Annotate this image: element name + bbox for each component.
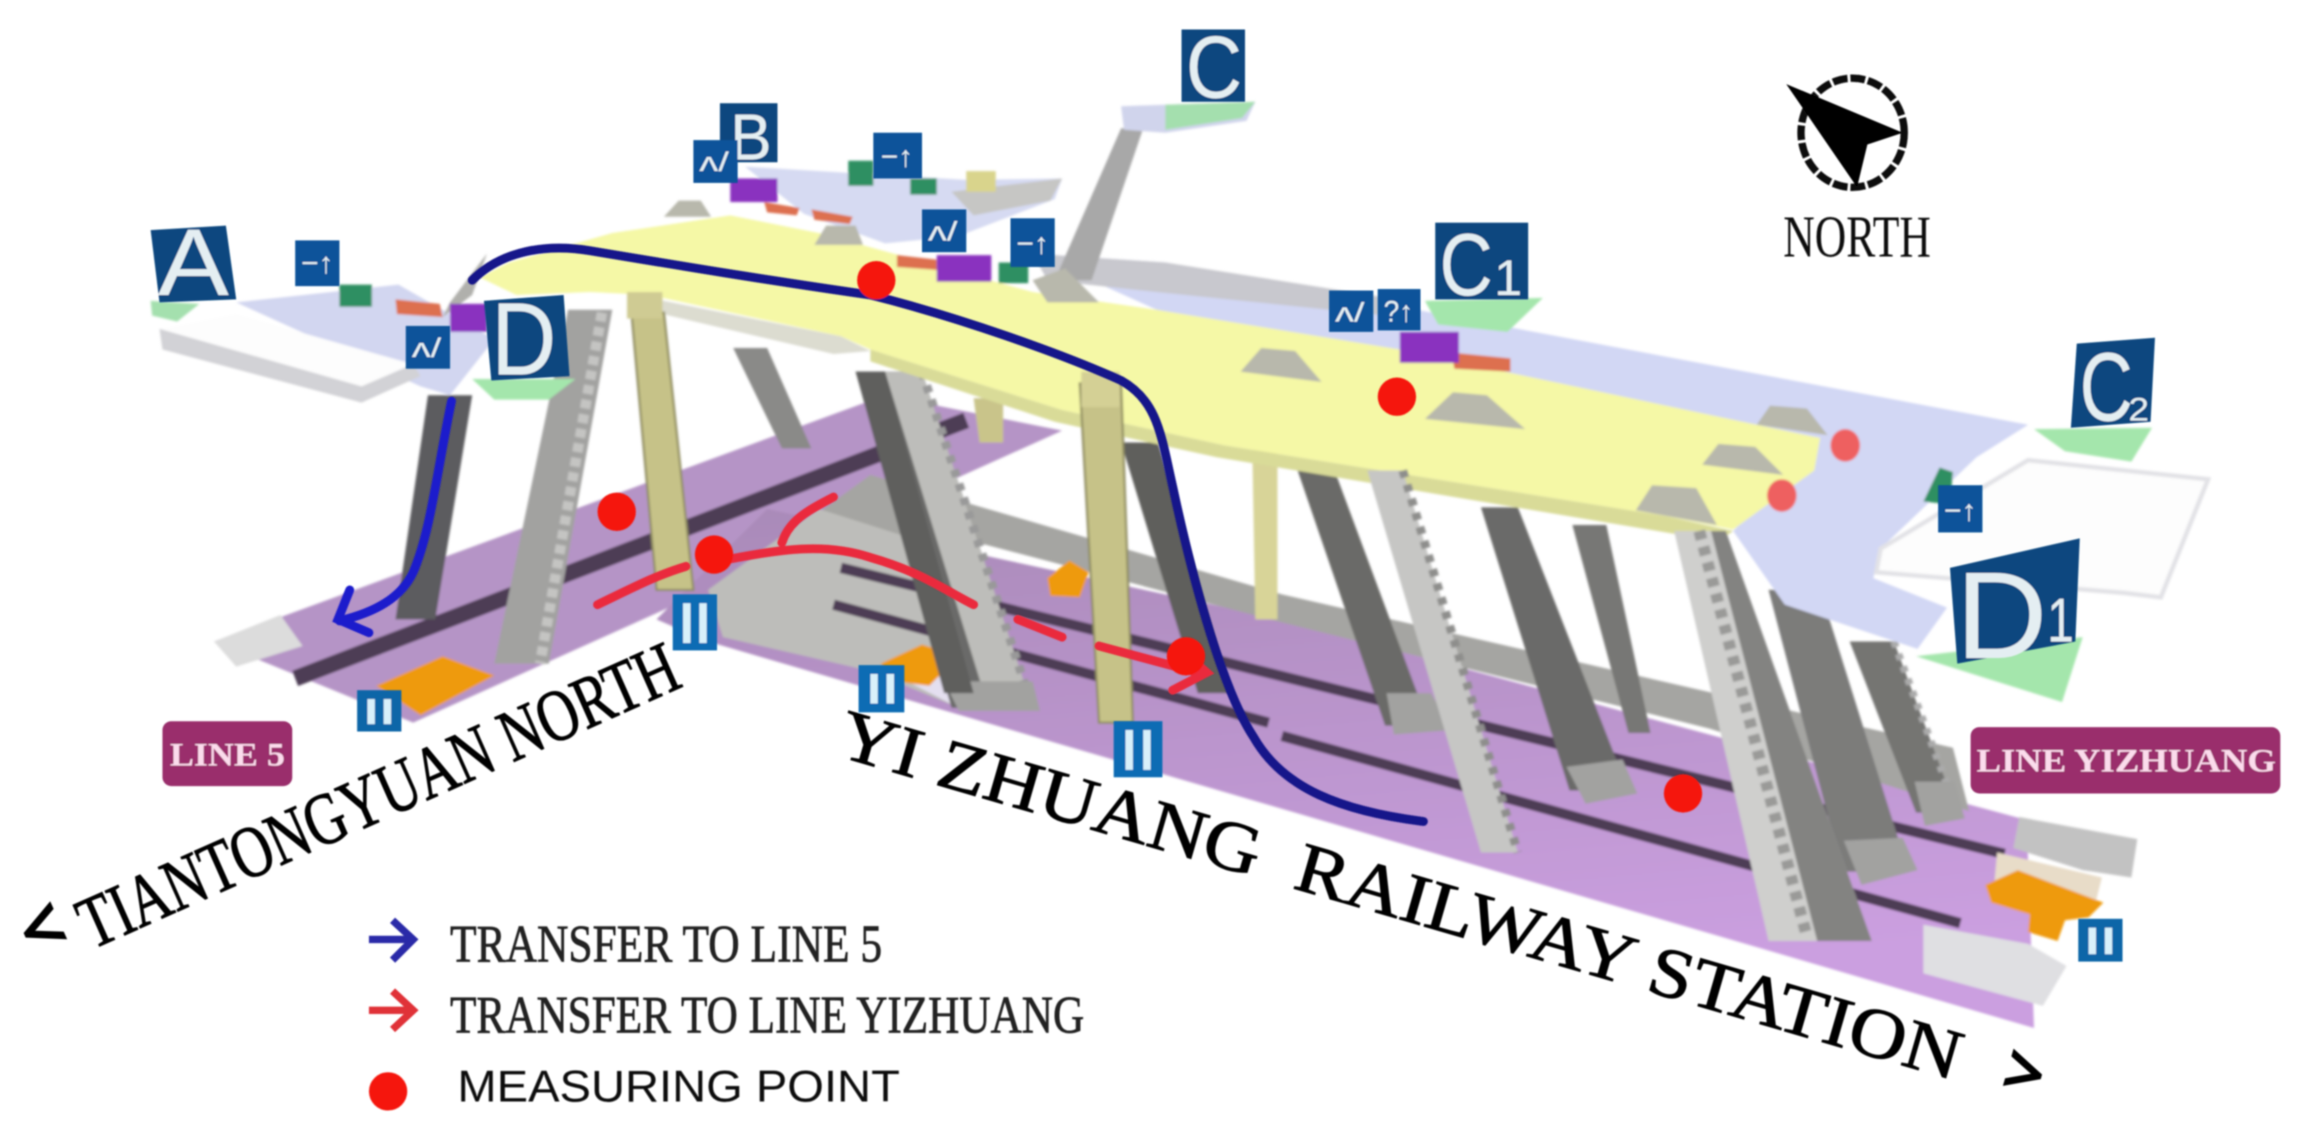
sign: exit C: C [1186, 17, 1242, 116]
direction label: Tiantongyuan North [6, 626, 691, 973]
rear columns and stairs [733, 348, 1965, 885]
wing: exit B [745, 167, 1062, 243]
legend: red arrow [369, 991, 413, 1029]
facility signs: tickets: ?↑ [1384, 296, 1413, 329]
facility signs: tickets: ᴧ/ [1335, 298, 1365, 328]
legend: measuring point: MEASURING POINT [457, 1063, 900, 1112]
concourse front edge [649, 298, 870, 354]
purple ticket blocks [450, 178, 1459, 363]
badge: line 5: LINE 5 [170, 737, 285, 773]
green blocks [339, 161, 1953, 504]
sign: exit D1: D [1956, 547, 2047, 685]
legend [369, 916, 1084, 1112]
green exit bases [472, 298, 2152, 702]
floor: line Yizhuang platform [657, 475, 2034, 1028]
stair to exit D [443, 254, 612, 664]
sign: exit A: A [158, 211, 229, 316]
facility signs: tickets [406, 140, 1420, 369]
front stairs [856, 372, 1872, 941]
sign: exit B: B [730, 100, 772, 173]
badge: line Yizhuang [1971, 727, 2280, 793]
legend: transfer to line Yizhuang: TRANSFER TO LINE YIZHUANG [450, 986, 1084, 1044]
sign: exit D1: 1 [2047, 587, 2074, 656]
stair to exit C [1055, 102, 1255, 280]
facility signs: tickets: ᴧ/ [928, 216, 958, 246]
direction label: Tiantongyuan North: TIANTONGYUAN NORTH [65, 626, 691, 964]
legend: transfer to line 5: TRANSFER TO LINE 5 [450, 916, 882, 974]
column under blue path [395, 395, 472, 619]
blue transfer path [338, 248, 1423, 821]
sign: exit D1 [1950, 538, 2080, 685]
track: line 5 [295, 420, 966, 678]
sign: exit C1: 1 [1494, 250, 1522, 306]
facility signs: tickets: ᴧ/ [699, 147, 730, 177]
yellow main concourse [480, 215, 1820, 529]
facility signs: tickets: ᴧ/ [412, 333, 442, 363]
wing: exit A [151, 285, 494, 403]
orange gates [395, 202, 1860, 512]
lavender concourse strip [1033, 254, 2028, 649]
facility signs: elevator: −↑ [1944, 495, 1977, 528]
sign: exit C1: C [1440, 215, 1493, 314]
white exit slab C2 D1 [1876, 460, 2208, 597]
measuring point markers [598, 261, 1702, 813]
badge: line Yizhuang: LINE YIZHUANG [1977, 743, 2276, 779]
platform ends [214, 615, 2137, 1006]
stair feet [944, 681, 1965, 885]
tracks: line Yizhuang [834, 568, 2005, 923]
icon: north compass [1786, 78, 1904, 187]
yellow columns [627, 292, 1133, 723]
3D station model [151, 102, 2208, 1028]
floor: line 5 platform [214, 395, 1062, 723]
badge: line 5 [162, 721, 292, 786]
direction label: Yi Zhuang Railway Station: YI ZHUANG RAILWAY STATION [831, 696, 1971, 1096]
facility signs: platform stairs [357, 594, 2123, 962]
sign: exit C1 [1435, 215, 1528, 314]
direction label: Tiantongyuan North: < [6, 881, 78, 973]
orange equipment blocks [376, 560, 2103, 941]
sign: exit C2: C [2080, 332, 2133, 441]
facility signs: elevator: −↑ [301, 247, 334, 280]
facility signs: elevator: −↑ [881, 141, 913, 174]
north label: NORTH [1783, 204, 1931, 270]
direction label: Yi Zhuang Railway Station: > [1996, 1031, 2054, 1114]
red transfer path [598, 497, 1207, 690]
gray humps on concourse [664, 201, 1828, 525]
facility signs: elevator: −↑ [1016, 228, 1049, 261]
sign: exit D: D [491, 282, 556, 397]
sign: exit C2: 2 [2128, 391, 2149, 427]
legend: red dot [369, 1072, 407, 1111]
legend: blue arrow [369, 920, 413, 960]
facility signs: elevator [295, 133, 1982, 532]
